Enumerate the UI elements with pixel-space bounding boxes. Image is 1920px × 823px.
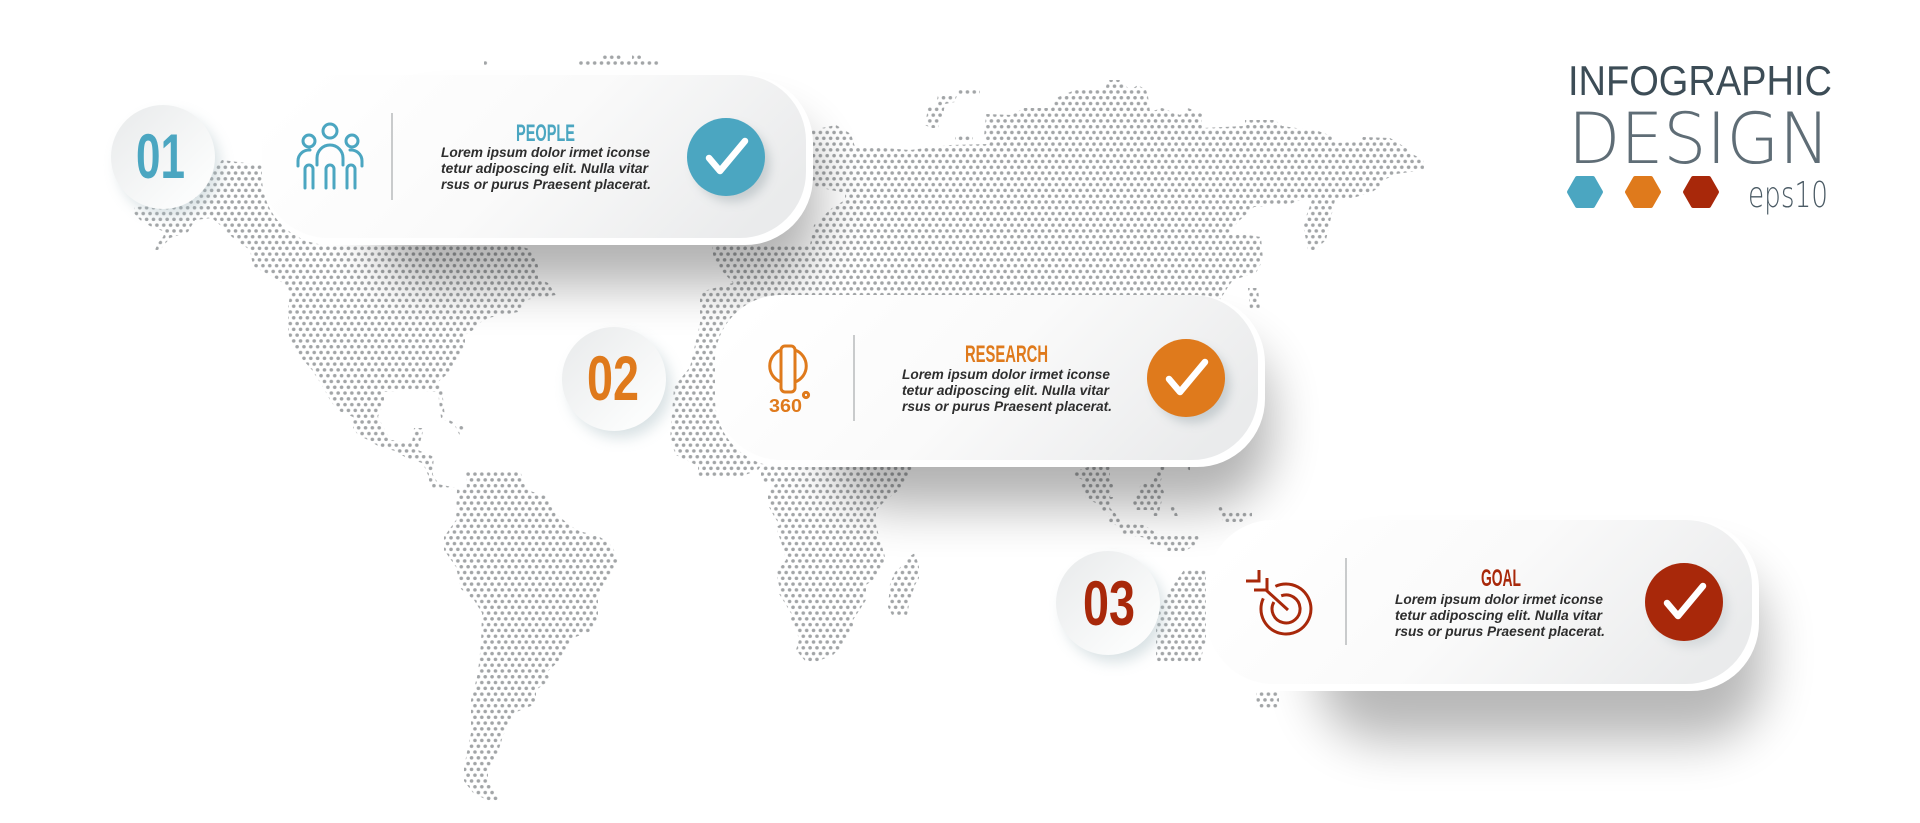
panel: step 02 research bbox=[562, 295, 1270, 507]
hexagon swatch red bbox=[1685, 178, 1717, 206]
check badge: people bbox=[687, 118, 770, 202]
divider bbox=[1345, 558, 1347, 645]
number badge 03 bbox=[1056, 551, 1165, 662]
panel shadow bbox=[825, 340, 1270, 507]
heading: infographic: INFOGRAPHIC bbox=[1568, 57, 1832, 104]
panel rim bbox=[715, 295, 1265, 467]
icon: people bbox=[298, 124, 362, 188]
heading: goal: GOAL bbox=[1481, 565, 1521, 592]
heading: people: PEOPLE bbox=[516, 120, 575, 147]
number badge 03: 03 bbox=[1083, 569, 1135, 639]
text block: people: tetur adiposcing elit. Nulla vitar bbox=[441, 160, 650, 176]
panel face bbox=[262, 75, 806, 238]
label: eps10: eps10 bbox=[1748, 175, 1828, 216]
text block: goal: Lorem ipsum dolor irmet iconse bbox=[1395, 591, 1603, 607]
text block: research: Lorem ipsum dolor irmet iconse bbox=[902, 366, 1110, 382]
number badge 01: 01 bbox=[136, 122, 185, 192]
panel: step 03 goal bbox=[1056, 520, 1764, 741]
text block: people: rsus or purus Praesent placerat. bbox=[441, 176, 651, 192]
icon: 360 degree bbox=[769, 346, 809, 416]
text block: research: rsus or purus Praesent placerat. bbox=[902, 398, 1112, 414]
number badge 01 bbox=[111, 105, 220, 216]
text block: goal: tetur adiposcing elit. Nulla vitar bbox=[1395, 607, 1604, 623]
divider bbox=[853, 335, 855, 421]
dotted world map bbox=[134, 56, 1424, 800]
number badge 02 bbox=[562, 327, 671, 438]
text block: research: tetur adiposcing elit. Nulla vitar bbox=[902, 382, 1111, 398]
panel shadow bbox=[1317, 565, 1764, 741]
panel rim bbox=[262, 75, 813, 245]
number badge 02: 02 bbox=[587, 344, 639, 414]
hexagon swatch blue bbox=[1569, 178, 1601, 206]
panel face bbox=[1207, 520, 1752, 684]
icon: target bbox=[1246, 570, 1311, 634]
icon: 360 degree: 360 bbox=[769, 396, 802, 416]
panel: step 01 people bbox=[111, 75, 818, 285]
check badge: goal bbox=[1645, 563, 1728, 647]
panel shadow bbox=[372, 120, 818, 285]
heading: research: RESEARCH bbox=[965, 341, 1048, 368]
check badge: research bbox=[1147, 339, 1230, 423]
divider bbox=[391, 113, 393, 200]
heading: design: DESIGN bbox=[1568, 98, 1830, 180]
panel rim bbox=[1207, 520, 1759, 691]
panel face bbox=[715, 295, 1258, 460]
hexagon swatch orange bbox=[1627, 178, 1659, 206]
text block: goal: rsus or purus Praesent placerat. bbox=[1395, 623, 1605, 639]
title block bbox=[1568, 57, 1832, 216]
text block: people: Lorem ipsum dolor irmet iconse bbox=[441, 144, 650, 160]
